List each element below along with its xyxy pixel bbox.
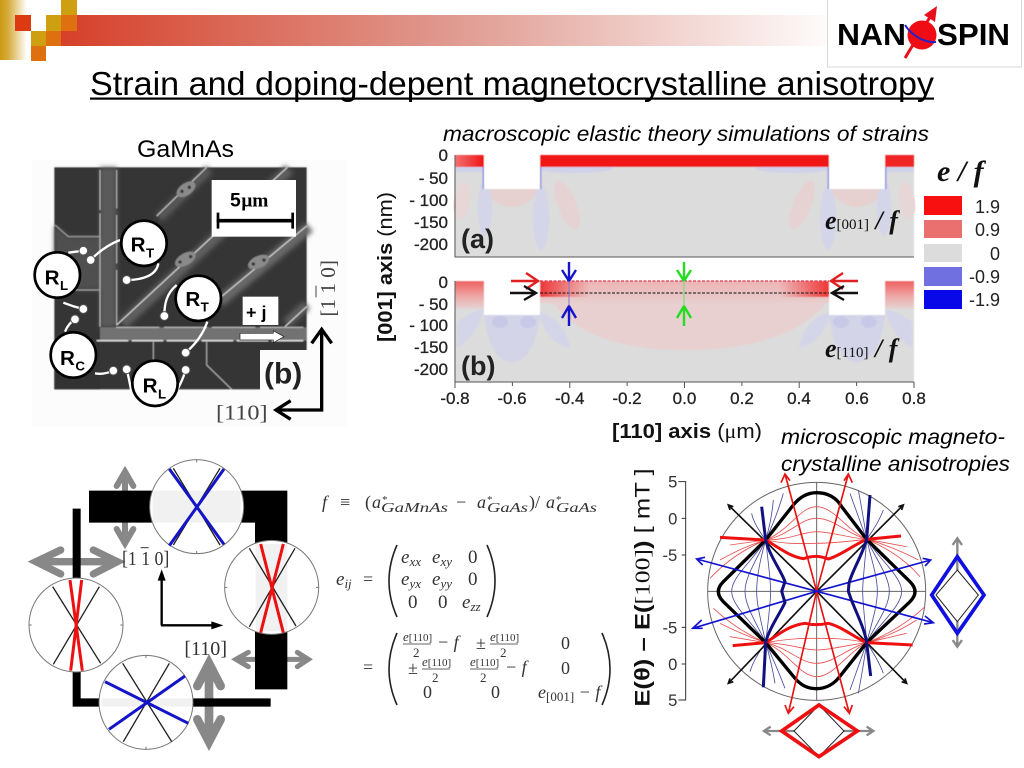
x axis labels: 0.6 [845, 389, 869, 408]
icon: blue diamond [932, 538, 984, 647]
R_T label right: T [201, 300, 209, 315]
formula: strain tensor: zz [469, 599, 481, 614]
micrograph image [54, 167, 309, 389]
circle: left red [29, 578, 123, 672]
y axis labels: - 100 [409, 316, 448, 335]
icon: red diamond [764, 705, 873, 757]
formula: f definition: GaMnAs [381, 501, 449, 516]
label [1-10]: [1 1 0] [122, 548, 169, 570]
formula: strain tensor: 0 [438, 592, 448, 613]
energy scale: 0 [668, 655, 677, 674]
panel label (b): (b) [264, 357, 302, 390]
logo: NanoSpin [828, 0, 1022, 67]
R_L label bottom [132, 361, 178, 406]
y axis labels: - 50 [419, 295, 448, 314]
formula: strain tensor expanded: ± [476, 633, 486, 653]
R_L label bottom: L [158, 386, 166, 401]
R_T label right [176, 276, 221, 321]
y axis labels [409, 146, 448, 379]
white cutout corner [260, 350, 308, 392]
thick black curve [718, 493, 915, 689]
formula: strain tensor expanded: 0 [423, 682, 432, 702]
panel: polar anisotropy plot [630, 468, 933, 713]
R_C label: R [60, 347, 75, 370]
formula: strain tensor expanded: e[110] [422, 654, 451, 669]
caption: macroscopic simulations: macroscopic elastic theory simulations of strains [443, 123, 930, 146]
crystal axes: [1 1 0] [318, 260, 340, 317]
x axis labels: -0.8 [440, 389, 470, 408]
x axis title: [110] axis (μm) [612, 421, 762, 443]
y axis labels: -200 [414, 235, 448, 254]
thin blue curves [732, 490, 902, 693]
y axis labels: -200 [414, 360, 448, 379]
thin red curves [710, 507, 925, 677]
formula: strain tensor expanded: 0 [561, 633, 570, 653]
x axis labels: -0.2 [612, 389, 642, 408]
formula: f definition: ( [365, 492, 371, 513]
header banner [0, 0, 841, 61]
formula: strain tensor: e [336, 569, 344, 590]
+j current arrow: + j [246, 302, 266, 322]
legend: 0.9 [975, 220, 1000, 240]
polar circle [708, 482, 926, 700]
+j current arrow [240, 297, 284, 343]
caption: microscopic anisotropies [781, 426, 1011, 476]
formula: strain tensor: e [432, 569, 440, 590]
small coordinate axes [158, 569, 223, 629]
formula: strain tensor: = [363, 569, 373, 589]
R_T label top: R [131, 234, 146, 257]
legend [924, 155, 1000, 310]
chart: strain simulations [375, 146, 926, 443]
formula: strain tensor: yx [407, 576, 421, 591]
formula: f definition: GaAs [556, 501, 598, 516]
legend: 1.9 [975, 197, 1000, 217]
axis ticks [455, 155, 914, 388]
caption: microscopic anisotropies: crystalline anisotropies [781, 453, 1011, 476]
x axis labels: 0.8 [902, 389, 926, 408]
x axis labels: 0.4 [787, 389, 811, 408]
formula: f definition: GaAs [487, 501, 529, 516]
circle: right red [225, 540, 319, 634]
formula: f definition: )/ [529, 492, 540, 513]
circle: bottom blue [99, 655, 193, 749]
R_L label left: L [60, 278, 68, 293]
logo: NanoSpin: SPIN [937, 17, 1010, 52]
plot (b): e[110]/f [455, 258, 914, 382]
formula: strain tensor: 0 [408, 592, 418, 613]
formula: f definition: f [322, 492, 330, 512]
formula: strain tensor expanded: 0 [491, 682, 500, 702]
formula: strain tensor expanded: e [538, 682, 546, 702]
R_C label: C [75, 359, 85, 374]
R_L label left [35, 252, 80, 298]
formula: strain tensor expanded: 2 [500, 645, 506, 660]
legend: e / f [937, 155, 987, 188]
energy scale: -5 [663, 546, 677, 565]
R_T label right: R [185, 288, 200, 311]
formula: f definition: * [556, 494, 562, 506]
scale bar: 5 [230, 191, 241, 212]
formula: strain tensor expanded: [001] [546, 689, 574, 704]
legend: 0 [990, 244, 1000, 264]
caption: microscopic anisotropies: microscopic magneto- [781, 426, 1005, 449]
formula: strain tensor: e [462, 592, 470, 613]
formula: strain tensor expanded: 2 [432, 670, 438, 685]
black device bars [73, 491, 287, 707]
formula: strain tensor expanded [363, 629, 610, 705]
gray strain arrows [36, 472, 308, 742]
R_T label top: T [146, 245, 154, 260]
formula: f definition: * [487, 494, 492, 506]
y axis labels: -150 [414, 338, 448, 357]
strain arrows [510, 262, 858, 326]
formula: f definition: a [372, 492, 381, 512]
formula: strain tensor: e [401, 547, 409, 568]
plot (a): e[001]/f [451, 150, 918, 257]
axis title: E(θ) – E([100]) [ mT ] [630, 468, 654, 707]
R_L label bottom: R [143, 375, 158, 398]
x axis labels: -0.6 [497, 389, 527, 408]
formula: f definition [322, 492, 598, 516]
circle: top blue [150, 460, 244, 554]
dashed reference lines [540, 280, 829, 282]
scale bar: μm [241, 191, 268, 212]
logo: NanoSpin: NAN [837, 17, 906, 52]
legend: -1.9 [969, 290, 1000, 310]
formula: strain tensor expanded: − f [505, 657, 530, 677]
energy scale [663, 473, 686, 710]
formula: strain tensor: ij [344, 576, 352, 591]
heading: GaMnAs: GaMnAs [137, 136, 234, 163]
formula: strain tensor expanded: − f [437, 632, 462, 652]
straight axis arrows [693, 474, 933, 713]
formula: strain tensor: xx [408, 554, 421, 569]
panel: SEM micrograph of device [32, 160, 347, 427]
y axis labels: - 50 [419, 169, 448, 188]
energy scale: 5 [668, 473, 677, 492]
formula: strain tensor expanded: = [363, 657, 373, 677]
formula: strain tensor expanded: e[110] [470, 654, 499, 669]
crystal axes: [110] [216, 402, 268, 424]
y axis labels: -150 [414, 213, 448, 232]
resistance connectors [63, 240, 207, 393]
formula: f definition: a [477, 492, 486, 512]
y axis labels: 0 [439, 273, 448, 292]
R_L label left: R [45, 266, 60, 289]
formula: strain tensor: 0 [468, 547, 478, 568]
formula: f definition: a [546, 492, 555, 512]
energy scale: 5 [668, 691, 677, 710]
crystal axes [216, 260, 340, 424]
formula: strain tensor expanded: e[110] [403, 629, 432, 644]
formula: strain tensor: e [432, 547, 440, 568]
y axis title: [001] axis (nm) [375, 192, 397, 342]
x axis labels: 0.2 [730, 389, 754, 408]
energy scale: 0 [668, 509, 677, 528]
formula: strain tensor: e [401, 569, 409, 590]
thick blue curves [762, 495, 871, 687]
formula: strain tensor expanded: ± [408, 658, 418, 678]
title: Strain and doping-depent magnetocrystalline anisotropy [90, 65, 935, 102]
thick red curves [720, 536, 913, 646]
energy scale: -5 [663, 618, 677, 637]
formula: strain tensor expanded: 2 [413, 645, 420, 660]
x axis labels [440, 389, 926, 408]
panel: device geometry schematic [29, 460, 319, 749]
formula: strain tensor: xy [439, 554, 452, 569]
label (b): (b) [461, 351, 495, 381]
R_T label top [121, 221, 167, 266]
label (a): (a) [461, 224, 494, 254]
R_C label [51, 332, 96, 378]
formula: strain tensor: 0 [468, 569, 478, 590]
x axis labels: -0.4 [555, 389, 584, 408]
formula: strain tensor expanded: 2 [480, 670, 486, 685]
legend: -0.9 [969, 267, 1000, 287]
formula: f definition: ≡ [340, 492, 350, 512]
formula: f definition: * [382, 494, 388, 506]
formula: strain tensor expanded: e[110] [490, 629, 519, 644]
scale bar [212, 180, 296, 237]
formula: strain tensor expanded: − f [574, 682, 603, 702]
label e110/f: e[110] / f [825, 334, 900, 363]
label e001/f: e[001] / f [825, 206, 900, 235]
formula: strain tensor expanded: 0 [561, 658, 570, 678]
y axis labels: 0 [439, 146, 448, 165]
formula: strain tensor: yy [438, 576, 452, 591]
y axis labels: - 100 [409, 191, 448, 210]
formula: strain tensor [336, 545, 495, 617]
formula: f definition: − [456, 492, 466, 512]
label [110]: [110] [184, 638, 227, 660]
x axis labels: 0.0 [673, 389, 696, 408]
